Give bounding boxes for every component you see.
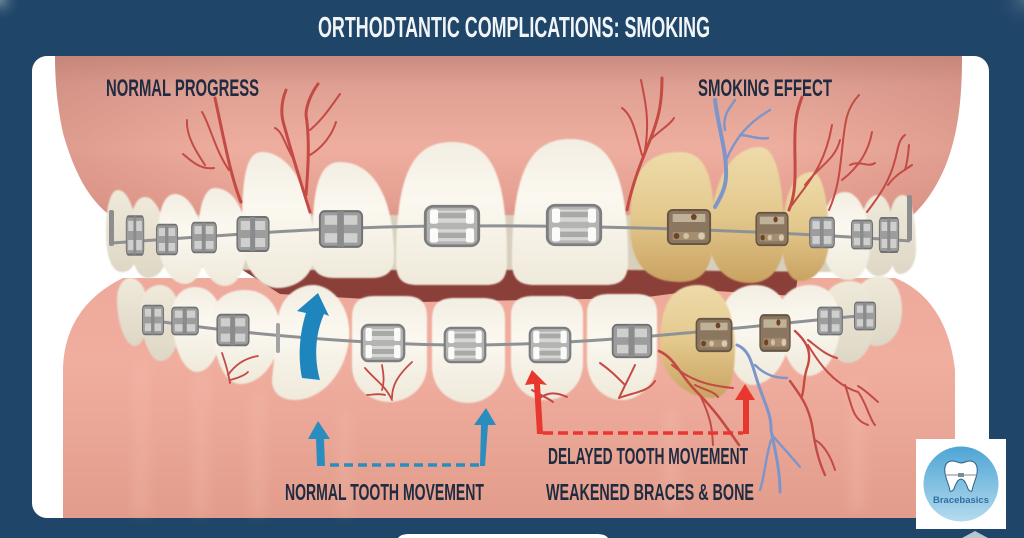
upper teeth xyxy=(106,139,916,288)
corner glow left xyxy=(0,0,22,22)
curved blue arrow xyxy=(297,293,329,380)
right blue arrow xyxy=(474,408,496,466)
label: weakened braces and bone: WEAKENED BRACES & BONE xyxy=(546,479,754,505)
vessels on lower left teeth xyxy=(222,353,412,400)
lower gum xyxy=(63,278,955,518)
right red arrow xyxy=(735,384,755,434)
logo badge xyxy=(916,439,1006,529)
blue dashed line xyxy=(330,463,480,467)
title: ORTHODTANTIC COMPLICATIONS: SMOKING xyxy=(318,12,710,44)
corner glow right xyxy=(994,0,1024,30)
blue vessel upper xyxy=(715,100,770,207)
blood vessels: upper smoking side xyxy=(789,95,912,212)
lower brackets xyxy=(142,302,876,362)
lower arch wire xyxy=(150,315,868,345)
label: delayed tooth movement: DELAYED TOOTH MOVEMENT xyxy=(548,443,748,469)
blue vessel lower xyxy=(737,345,800,492)
delayed movement bracket arrows xyxy=(525,370,755,434)
left blue arrow xyxy=(308,421,330,466)
illustration: braces on teeth xyxy=(55,56,962,518)
left red arrow xyxy=(525,370,547,434)
logo tooth icon xyxy=(945,461,977,491)
label: normal tooth movement: NORMAL TOOTH MOVEMENT xyxy=(285,479,484,505)
upper arch wire xyxy=(112,226,910,243)
logo brace wire xyxy=(945,473,977,477)
bottom white tab xyxy=(398,534,608,538)
vessels on lower right teeth and gum xyxy=(532,331,878,475)
upper gum xyxy=(55,56,962,240)
bottom right tab xyxy=(962,531,988,538)
normal movement bracket arrows xyxy=(308,408,496,466)
upper brackets xyxy=(109,195,912,255)
label: smoking effect: SMOKING EFFECT xyxy=(698,75,832,102)
blood vessels: upper healthy side xyxy=(183,78,674,212)
mouth interior xyxy=(230,262,800,302)
label: normal progress: NORMAL PROGRESS xyxy=(106,75,259,102)
lower teeth xyxy=(117,276,902,403)
upper teeth backing xyxy=(120,215,900,272)
logo wordmark: Bracebasics xyxy=(933,495,989,506)
red dashed line xyxy=(543,431,743,435)
